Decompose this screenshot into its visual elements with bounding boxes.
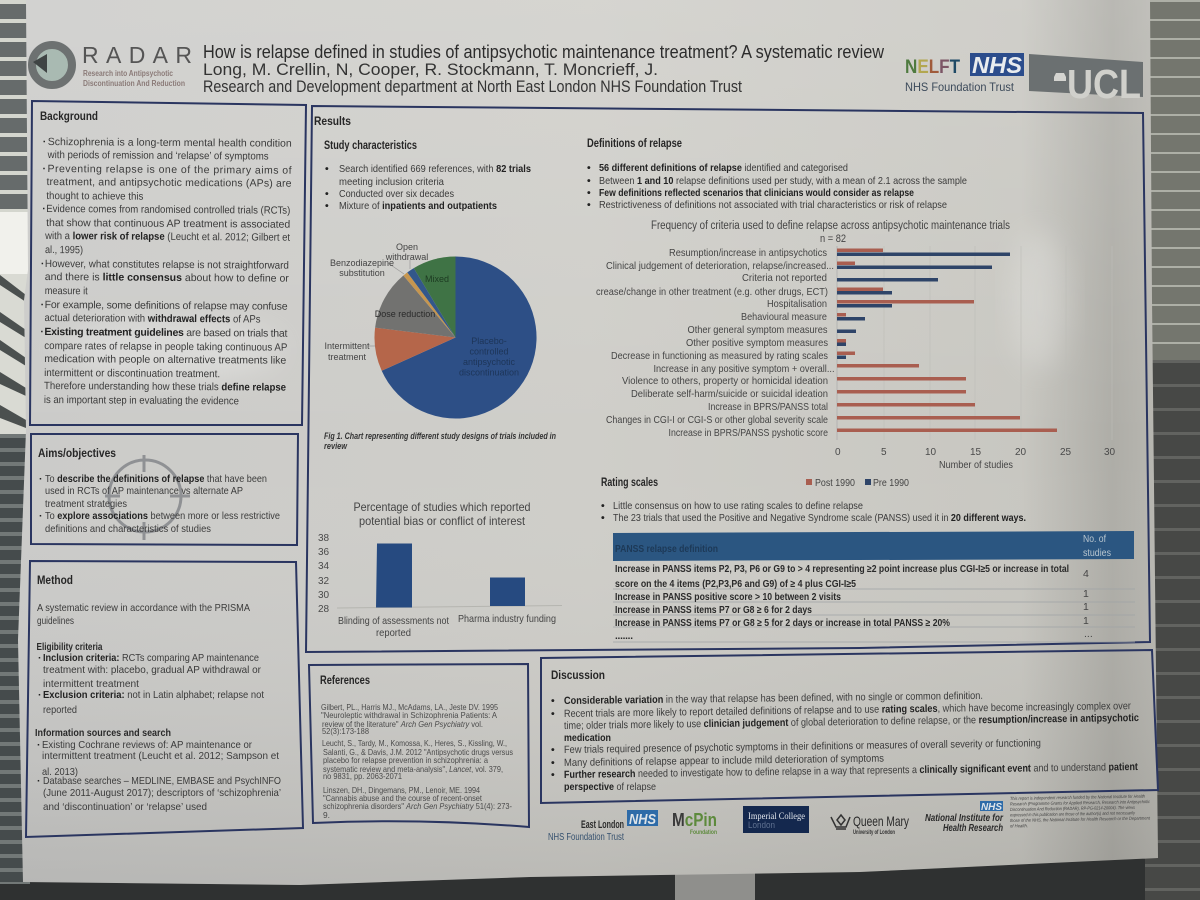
logo: Queen Mary bbox=[831, 813, 909, 836]
aims bullet text: used in RCTs of AP maintenance vs alternate AP bbox=[45, 485, 243, 497]
discussion bullets: time; older trials more likely to use clinician judgement of global deterioration to define relapse, or the resumption/increase in antipsychotic bbox=[564, 712, 1139, 732]
y axis labels: 28 bbox=[318, 604, 330, 615]
criteria labels: Deliberate self-harm/suicide or suicidal ideation bbox=[631, 388, 828, 400]
panel: discussion bbox=[541, 650, 1158, 803]
aims bullet text: To explore associations between more or less restrictive bbox=[45, 510, 280, 522]
reference list: "Neuroleptic withdrawal in Schizophrenia Patients: A bbox=[321, 710, 497, 720]
definitions bullets: • bbox=[587, 162, 591, 174]
discussion bullets: Further research needed to investigate how to define relapse in a way that represents a clinically significant event and to understand patient bbox=[564, 761, 1138, 781]
criteria labels: Clinical judgement of deterioration, relapse/increased... bbox=[606, 260, 834, 272]
criteria labels: Violence to others, property or homicidal ideation bbox=[622, 375, 828, 387]
slice: intermittent treatment bbox=[375, 328, 456, 371]
x axis ticks: 5 bbox=[881, 447, 887, 458]
logo: McPin Foundation: McPin bbox=[672, 810, 717, 830]
chart title: Percentage of studies which reported bbox=[354, 500, 530, 514]
figure caption: review bbox=[324, 441, 348, 451]
criteria labels: Decrease in functioning as measured by rating scales bbox=[611, 350, 828, 362]
information sources and search: (June 2011-August 2017); descriptors of ‘schizophrenia’ bbox=[43, 787, 281, 799]
table rows: 1 bbox=[1083, 588, 1089, 600]
table rows: Increase in PANSS items P2, P3, P6 or G9 to > 4 representing ≥2 point increase plus CGI-I≥5 or increase in total bbox=[615, 564, 1069, 575]
bar: blinding of assessments bbox=[376, 544, 412, 608]
information sources and search: al. 2013) bbox=[42, 766, 78, 778]
information sources and search: Existing Cochrane reviews of: AP maintenance or bbox=[42, 739, 252, 751]
background bullet text: Schizophrenia is a long-term mental health condition bbox=[48, 136, 292, 150]
background bullet text: Preventing relapse is one of the primary aims of bbox=[48, 163, 292, 177]
figure caption: Fig 1. Chart representing different study designs of trials included in bbox=[324, 431, 556, 441]
chart title bbox=[651, 220, 1010, 245]
reference list: 52(3):173-188 bbox=[322, 726, 369, 736]
pie labels: antipsychotic bbox=[463, 357, 516, 367]
background bullet text: is an important step in evaluating the evidence bbox=[44, 394, 239, 407]
slice: placebo-controlled discontinuation bbox=[382, 256, 537, 419]
reference list: schizophrenia disorders" Arch Gen Psychiatry 51(4): 273- bbox=[323, 801, 512, 811]
study characteristics bullets: Conducted over six decades bbox=[339, 188, 454, 200]
discussion bullets bbox=[551, 690, 1139, 793]
panel: background bbox=[30, 101, 306, 425]
eligibility criteria bbox=[36, 642, 264, 716]
information sources and search: · bbox=[37, 775, 40, 787]
background bullet text: measure it bbox=[45, 285, 88, 297]
title block: How is relapse defined in studies of antipsychotic maintenance treatment? A systematic review bbox=[203, 41, 885, 62]
y axis labels: 34 bbox=[318, 561, 330, 572]
background bullet text: · bbox=[41, 299, 44, 311]
chart legend bbox=[806, 478, 909, 489]
logo: NELFT NHS: NHS bbox=[972, 52, 1023, 78]
criteria labels: Behavioural measure bbox=[741, 311, 827, 323]
logo: NELFT NHS bbox=[905, 52, 1024, 94]
reference list: Gilbert, PL., Harris MJ., McAdams, LA., Jeste DV. 1995 bbox=[321, 702, 498, 712]
rating scales bullets: • bbox=[601, 512, 605, 524]
heading: references: References bbox=[320, 675, 370, 687]
eligibility criteria: Eligibility criteria bbox=[36, 642, 103, 653]
funding disclaimer: those of the NHS, the National Institute for Health Research or the Department bbox=[1010, 816, 1151, 823]
discussion bullets: Few trials required presence of psychotic symptoms in their definitions or measures of overall severity or functioning bbox=[564, 737, 1041, 756]
study characteristics bullets: meeting inclusion criteria bbox=[339, 176, 444, 188]
discussion bullets: • bbox=[551, 708, 555, 720]
reference list: Leucht, S., Tardy, M., Komossa, K., Heres, S., Kissling, W., bbox=[322, 738, 507, 748]
information sources and search: Database searches – MEDLINE, EMBASE and PsychINFO bbox=[43, 775, 281, 787]
chart title: potential bias or conflict of interest bbox=[359, 514, 526, 528]
logo: East London NHS bbox=[548, 810, 658, 843]
eligibility criteria: reported bbox=[43, 704, 77, 716]
RADAR strapline bbox=[83, 69, 185, 88]
information sources and search: Information sources and search bbox=[35, 728, 171, 739]
definitions bullets: • bbox=[587, 199, 591, 211]
background bullet text: with a lower risk of relapse (Leucht et al. 2012; Gilbert et bbox=[44, 230, 290, 244]
discussion bullets: • bbox=[551, 695, 555, 707]
background bullet text: · bbox=[42, 203, 46, 215]
reference list bbox=[321, 702, 513, 820]
background bullet text: Existing treatment guidelines are based on trials that bbox=[44, 326, 288, 340]
heading: method: Method bbox=[37, 575, 73, 587]
RADAR wordmark: RADAR bbox=[82, 42, 192, 68]
heading: aims: Aims/objectives bbox=[38, 448, 116, 460]
reference list: "Cannabis abuse and the course of recent-onset bbox=[323, 793, 483, 803]
table header: No. of bbox=[1083, 534, 1106, 545]
eligibility criteria: Inclusion criteria: RCTs comparing AP maintenance bbox=[43, 652, 259, 664]
pie labels: withdrawal bbox=[385, 252, 428, 262]
criteria labels: Resumption/increase in antipsychotics bbox=[669, 247, 827, 259]
table rows bbox=[615, 564, 1093, 642]
bar chart: bias and conflict of interest bbox=[318, 500, 562, 639]
y axis labels bbox=[318, 533, 330, 615]
pie labels: Mixed bbox=[425, 274, 449, 284]
information sources and search: intermittent treatment (Leucht et al. 2012; Sampson et bbox=[42, 750, 279, 762]
criteria labels: Increase in BPRS/PANSS total bbox=[708, 401, 828, 413]
funding disclaimer: of Health. bbox=[1010, 823, 1028, 828]
background bullet text: · bbox=[40, 326, 44, 338]
y axis labels: 36 bbox=[318, 547, 330, 558]
reference list: systematic review and meta-analysis", Lancet, vol. 379, bbox=[323, 764, 503, 774]
discussion bullets: • bbox=[551, 744, 555, 756]
reference list: no 9831, pp. 2063-2071 bbox=[323, 771, 402, 781]
pie labels: Placebo- bbox=[471, 336, 507, 346]
pie labels: controlled bbox=[469, 346, 509, 356]
rating scales bullets: The 23 trials that used the Positive and Negative Syndrome scale (PANSS) used it in 20 different ways. bbox=[613, 512, 1026, 524]
reference list: placebo for relapse prevention in schizophrenia: a bbox=[323, 755, 488, 765]
logo: McPin Foundation: Foundation bbox=[690, 830, 717, 836]
pie labels: Intermittent bbox=[324, 341, 370, 351]
background bullet text: intermittent or discontinuation treatment. bbox=[44, 367, 220, 380]
logo: UCL: UCL bbox=[1067, 61, 1141, 107]
information sources and search bbox=[35, 728, 281, 813]
background bullet text: with periods of remission and ‘relapse’ of symptoms bbox=[47, 149, 269, 163]
y axis labels: 30 bbox=[318, 590, 330, 601]
study characteristics bullets: • bbox=[325, 188, 329, 200]
rating scales bullets: Little consensus on how to use rating scales to define relapse bbox=[613, 500, 863, 512]
study characteristics bullets: Search identified 669 references, with 82 trials bbox=[339, 163, 531, 175]
icon: radar ring bbox=[32, 45, 72, 85]
background bullet text bbox=[40, 136, 292, 408]
panel: method bbox=[26, 561, 303, 837]
logo: National Institute for Health Research: NHS bbox=[981, 802, 1002, 813]
criteria labels: Hospitalisation bbox=[767, 298, 827, 310]
definitions bullets bbox=[587, 162, 967, 211]
aims bullet text: · bbox=[39, 510, 42, 522]
aims bullet text: · bbox=[39, 473, 42, 485]
criteria labels: Other general symptom measures bbox=[688, 324, 828, 336]
post 1990 bars bbox=[837, 248, 1057, 432]
pie labels: treatment bbox=[328, 352, 367, 362]
logo: East London NHS: NHS bbox=[629, 811, 656, 828]
chart title: Frequency of criteria used to define relapse across antipsychotic maintenance trials bbox=[651, 220, 1010, 232]
logo: UCL bbox=[1029, 54, 1143, 107]
title block: Research and Development department at North East London NHS Foundation Trust bbox=[203, 78, 742, 96]
method intro bbox=[37, 602, 250, 627]
background bullet text: and there is little consensus about how to define or bbox=[45, 271, 289, 285]
y axis labels: 32 bbox=[318, 576, 330, 587]
logo: Imperial College London bbox=[743, 806, 809, 833]
heading: study characteristics: Study characteristics bbox=[324, 140, 417, 152]
logo: Queen Mary: Queen Mary bbox=[853, 813, 909, 829]
logo: Imperial College London: London bbox=[748, 820, 775, 830]
background bullet text: al., 1995) bbox=[45, 244, 83, 256]
x axis ticks: 20 bbox=[1015, 447, 1027, 458]
criteria labels: Criteria not reported bbox=[742, 272, 827, 284]
discussion bullets: • bbox=[551, 757, 555, 769]
background bullet text: For example, some definitions of relapse may confuse bbox=[45, 299, 288, 313]
information sources and search: · bbox=[37, 739, 40, 751]
background bullet text: thought to achieve this bbox=[46, 190, 143, 203]
study characteristics bullets: • bbox=[325, 200, 329, 212]
discussion bullets: medication bbox=[564, 732, 611, 744]
eligibility criteria: intermittent treatment bbox=[43, 678, 139, 690]
panel: references bbox=[309, 664, 529, 827]
background bullet text: Therefore understanding how these trials define relapse bbox=[44, 380, 286, 394]
funding disclaimer: expressed in this publication are those of the author(s) and not necessarily bbox=[1010, 810, 1136, 817]
heading: definitions of relapse: Definitions of relapse bbox=[587, 138, 682, 150]
funding disclaimer: This report is independent research funded by the National Institute for Health bbox=[1010, 794, 1145, 801]
reference list: review of the literature" Arch Gen Psychiatry vol. bbox=[322, 719, 483, 729]
x axis labels: reported bbox=[376, 627, 411, 639]
funding disclaimer: Discontinuation And Reduction (RADAR), RP-PG-0214-20004). The views bbox=[1010, 805, 1136, 812]
method intro: guidelines bbox=[37, 615, 74, 627]
aims bullet text: treatment strategies bbox=[45, 498, 127, 510]
table header: studies bbox=[1083, 548, 1111, 559]
reference list: Linszen, DH., Dingemans, PM., Lenoir, ME. 1994 bbox=[323, 785, 480, 795]
table rows: Increase in PANSS items P7 or G8 ≥ 6 for 2 days bbox=[615, 605, 812, 616]
funding disclaimer bbox=[1010, 794, 1151, 828]
criteria labels: Increase in any positive symptom + overall... bbox=[654, 363, 834, 375]
bar chart: frequency of criteria bbox=[596, 220, 1116, 489]
figure caption bbox=[324, 431, 556, 451]
pie labels bbox=[324, 242, 519, 378]
logo: East London NHS: East London bbox=[581, 819, 624, 831]
logo: National Institute for Health Research: National Institute for bbox=[925, 813, 1004, 824]
method intro: A systematic review in accordance with the PRISMA bbox=[37, 602, 250, 614]
x axis ticks: 25 bbox=[1060, 447, 1072, 458]
reference list: Salanti, G., & Davis, J.M. 2012 "Antipsychotic drugs versus bbox=[323, 747, 513, 757]
pie labels: Benzodiazepine bbox=[330, 258, 394, 268]
definitions bullets: • bbox=[587, 187, 591, 199]
x axis labels: Blinding of assessments not bbox=[338, 615, 449, 627]
slice: open withdrawal bbox=[407, 268, 456, 338]
logo: NELFT NHS: NHS Foundation Trust bbox=[905, 80, 1015, 94]
discussion bullets: Considerable variation in the way that relapse has been defined, with no single or common definition. bbox=[564, 690, 983, 707]
criteria labels: Other positive symptom measures bbox=[686, 337, 828, 349]
table rows: 4 bbox=[1083, 568, 1089, 580]
discussion bullets: Many definitions of relapse appear to include mild deterioration of symptoms bbox=[564, 753, 884, 769]
x axis ticks: 0 bbox=[835, 447, 841, 458]
eligibility criteria: Exclusion criteria: not in Latin alphabet; relapse not bbox=[43, 689, 264, 701]
definitions bullets: Restrictiveness of definitions not associated with trial characteristics or risk of relapse bbox=[599, 199, 947, 211]
pie labels: Dose reduction bbox=[375, 309, 435, 319]
eligibility criteria: treatment with: placebo, gradual AP withdrawal or bbox=[43, 664, 261, 676]
x axis ticks: 15 bbox=[970, 447, 982, 458]
x axis ticks bbox=[835, 447, 1116, 458]
rating scales bullets bbox=[601, 500, 1026, 524]
aims bullet text bbox=[39, 473, 280, 535]
heading: rating scales: Rating scales bbox=[601, 477, 658, 489]
background bullet text: compare rates of relapse in people taking continuous AP bbox=[44, 340, 287, 354]
RADAR strapline: Research into Antipsychotic bbox=[83, 69, 173, 78]
table header: PANSS relapse definition bbox=[615, 543, 718, 555]
logo: National Institute for Health Research: Health Research bbox=[943, 823, 1003, 834]
chart title bbox=[354, 500, 530, 528]
eligibility criteria: · bbox=[38, 652, 42, 664]
panel: results bbox=[306, 106, 1150, 652]
x axis ticks: 30 bbox=[1104, 447, 1116, 458]
chart legend: Pre 1990 bbox=[873, 478, 909, 489]
criteria labels bbox=[596, 247, 834, 439]
slice: benzodiazepine substitution bbox=[403, 272, 456, 338]
definitions bullets: Few definitions reflected scenarios that clinicians would consider as relapse bbox=[599, 187, 914, 199]
background bullet text: · bbox=[41, 258, 44, 270]
definitions bullets: Between 1 and 10 relapse definitions used per study, with a mean of 2.1 across the sample bbox=[599, 175, 967, 187]
title block: Long, M. Crellin, N, Cooper, R. Stockmann, T. Moncrieff, J. bbox=[203, 61, 658, 79]
icon: crosshair overlay bbox=[105, 455, 190, 540]
table rows: ....... bbox=[615, 631, 633, 642]
logo: East London NHS: NHS Foundation Trust bbox=[548, 832, 624, 843]
eligibility criteria: · bbox=[38, 689, 42, 701]
x axis title: Number of studies bbox=[939, 460, 1013, 471]
x axis labels bbox=[338, 613, 556, 639]
pre 1990 bars bbox=[837, 252, 1010, 359]
reference list: 9. bbox=[323, 810, 330, 820]
x axis ticks: 10 bbox=[925, 447, 937, 458]
definitions bullets: 56 different definitions of relapse identified and categorised bbox=[599, 162, 848, 174]
heading: discussion: Discussion bbox=[551, 670, 605, 682]
header: RADAR logo bbox=[32, 42, 192, 88]
panel: aims and objectives bbox=[31, 434, 298, 545]
logo: Imperial College London: Imperial College bbox=[748, 811, 805, 821]
table rows: Increase in PANSS positive score > 10 between 2 visits bbox=[615, 592, 841, 603]
bar: pharma industry funding bbox=[490, 578, 525, 606]
pie chart: study designs bbox=[324, 242, 537, 419]
funding disclaimer: Research (Programme Grants for Applied Research, Research into Antipsychotic bbox=[1010, 799, 1151, 806]
discussion bullets: • bbox=[551, 769, 555, 781]
discussion bullets: Recent trials are more likely to report detailed definitions of relapse and to use rating scales, which have become increasingly complex over bbox=[564, 700, 1131, 720]
background bullet text: actual deterioration with withdrawal effects of APs bbox=[44, 312, 261, 326]
rating scales bullets: • bbox=[601, 500, 605, 512]
background bullet text: that show that continuous AP treatment is associated bbox=[46, 217, 290, 231]
table rows: ... bbox=[1084, 628, 1093, 640]
background bullet text: medication with people on alternative treatments like bbox=[44, 353, 286, 367]
table header bbox=[613, 531, 1134, 561]
background bullet text: · bbox=[43, 163, 46, 175]
aims bullet text: To describe the definitions of relapse that have been bbox=[45, 473, 267, 485]
title block bbox=[203, 41, 885, 96]
definitions bullets: • bbox=[587, 175, 591, 187]
table rows: score on the 4 items (P2,P3,P6 and G9) of ≥ 4 plus CGI-I≥5 bbox=[615, 579, 856, 590]
criteria labels: Increase in BPRS/PANSS pyshotic score bbox=[668, 427, 828, 439]
information sources and search: and ‘discontinuation’ or ‘relapse’ used bbox=[43, 801, 207, 813]
logo: Queen Mary: University of London bbox=[853, 830, 895, 836]
chart legend: Post 1990 bbox=[815, 478, 855, 489]
table rows: 1 bbox=[1083, 615, 1089, 627]
study characteristics bullets: • bbox=[325, 163, 329, 175]
criteria labels: Changes in CGI-I or CGI-S or other global severity scale bbox=[606, 414, 828, 426]
heading: results: Results bbox=[314, 116, 351, 128]
table: PANSS relapse definitions bbox=[613, 531, 1135, 642]
pie labels: substitution bbox=[339, 268, 385, 278]
logo: National Institute for Health Research bbox=[925, 801, 1004, 834]
slice: dose reduction bbox=[375, 276, 456, 338]
table rows: Increase in PANSS items P7 or G8 ≥ 5 for 2 days or increase in total PANSS ≥ 20% bbox=[615, 618, 950, 629]
background bullet text: However, what constitutes relapse is not straightforward bbox=[45, 258, 289, 272]
background bullet text: treatment, and antipsychotic medications (APs) are bbox=[46, 176, 292, 190]
criteria labels: crease/change in other treatment (e.g. other drugs, ECT) bbox=[596, 286, 828, 298]
chart title: n = 82 bbox=[820, 233, 846, 245]
pie labels: Open bbox=[396, 242, 418, 252]
background bullet text: · bbox=[43, 136, 46, 148]
slice: mixed bbox=[414, 256, 456, 338]
discussion bullets: perspective of relapse bbox=[564, 781, 656, 793]
study characteristics bullets: Mixture of inpatients and outpatients bbox=[339, 200, 497, 212]
aims bullet text: definitions and characteristics of studies bbox=[45, 523, 211, 535]
RADAR strapline: Discontinuation And Reduction bbox=[83, 79, 185, 88]
x axis labels: Pharma industry funding bbox=[458, 613, 556, 625]
y axis labels: 38 bbox=[318, 533, 330, 544]
study characteristics bullets bbox=[325, 163, 531, 212]
table rows: 1 bbox=[1083, 601, 1089, 613]
heading: background: Background bbox=[40, 111, 98, 123]
background bullet text: Evidence comes from randomised controlled trials (RCTs) bbox=[46, 203, 290, 217]
pie labels: discontinuation bbox=[459, 368, 519, 378]
logo: NELFT NHS: NELFT bbox=[905, 57, 960, 78]
